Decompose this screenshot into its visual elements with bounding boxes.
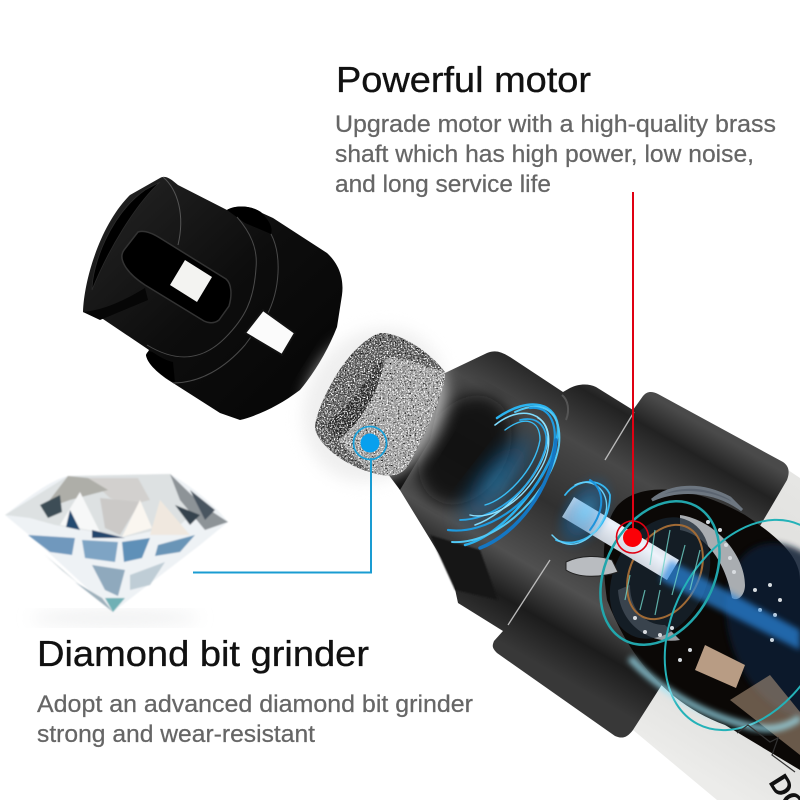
text block: motor description: and long service life: [335, 171, 551, 198]
white lower body: [633, 470, 800, 800]
blue leader line: [193, 458, 371, 572]
diamond bit: [294, 328, 458, 486]
text block: motor description: shaft which has high power, low noise,: [335, 141, 754, 168]
perforated disc: [680, 515, 745, 599]
teal energy streaks: [625, 530, 700, 615]
auger detail: [566, 556, 618, 576]
circuit text mark on white body: [737, 725, 795, 772]
gray housing collar: [652, 487, 742, 510]
blue light beam: [660, 560, 800, 650]
device head and motor housing: [388, 351, 800, 800]
heading: diamond bit grinder: Diamond bit grinder: [37, 633, 369, 674]
teal inner ring: [577, 481, 743, 665]
red leader line: [632, 192, 634, 530]
text block: motor description: [335, 111, 776, 198]
diamond illustration: [5, 474, 228, 626]
text block: diamond description: strong and wear-resistant: [37, 721, 315, 748]
red marker on motor: [616, 521, 648, 553]
heading: powerful motor: Powerful motor: [336, 59, 591, 100]
blue swirl: large: [437, 405, 559, 548]
icon: cap window upper: [170, 260, 212, 302]
teal outer ring: [630, 490, 800, 760]
blue arc band: [630, 658, 800, 729]
black housing: [395, 351, 789, 738]
text block: diamond description: [37, 691, 473, 748]
text block: motor description: Upgrade motor with a high-quality brass: [335, 111, 776, 138]
motor shaft: [562, 497, 679, 580]
black nozzle cap: [83, 177, 342, 420]
text block: diamond description: Adopt an advanced diamond bit grinder: [37, 691, 473, 718]
blue swirl: small around shaft: [542, 463, 628, 561]
motor cutaway interior: [562, 481, 800, 772]
icon: cap inner slot: [122, 231, 231, 323]
blue marker on bit: [354, 426, 386, 460]
icon: cap window lower: [245, 310, 295, 355]
